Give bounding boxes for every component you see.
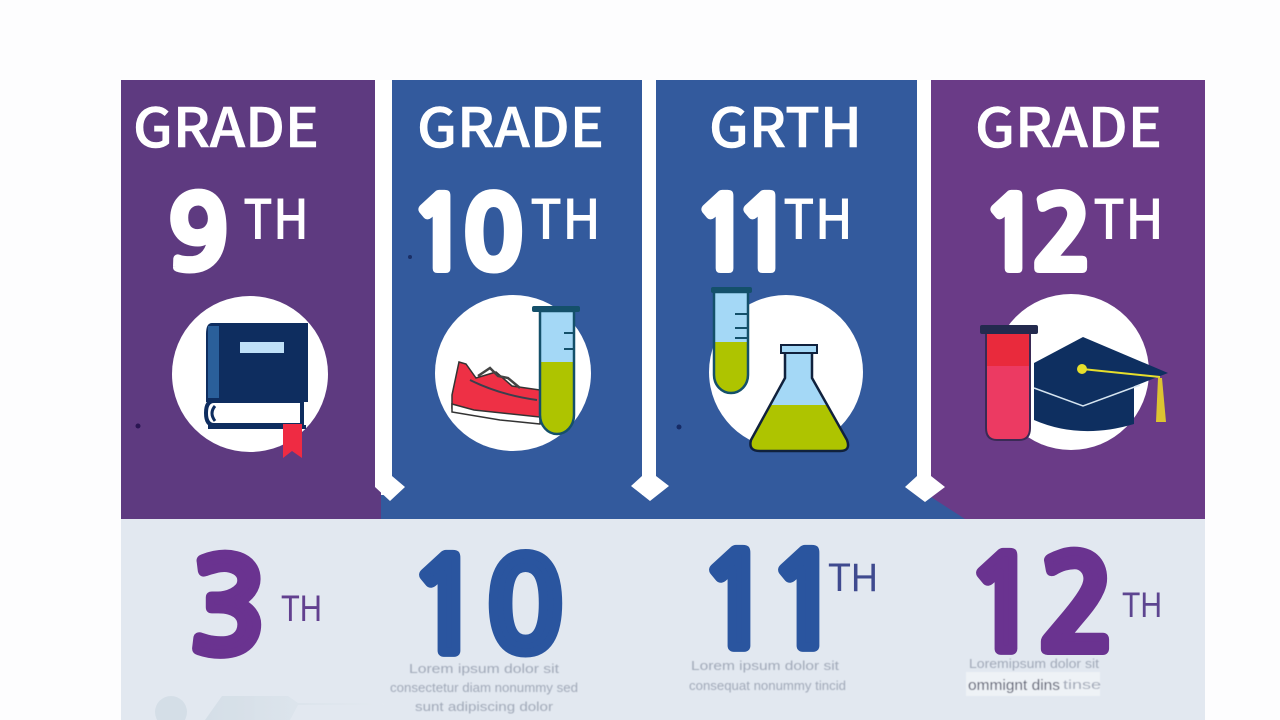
number: 11th xyxy=(692,175,853,284)
icon: sneaker and test tube xyxy=(435,295,591,451)
number: 10th xyxy=(409,175,601,284)
column: 12 xyxy=(964,543,1162,696)
column: 12: TH xyxy=(1122,586,1162,625)
description: 11: consequat nonummy tincid xyxy=(689,678,846,693)
number: 10th: TH xyxy=(530,175,601,255)
column: 10: 10 xyxy=(407,545,564,672)
heading: grade 10: GRADE xyxy=(417,84,604,163)
number: 9th: 9 xyxy=(168,185,229,284)
description: 10 xyxy=(390,661,578,714)
description: 12: tinse xyxy=(1063,677,1101,692)
blue base strip xyxy=(381,495,971,519)
column: 3th xyxy=(189,546,322,673)
panel: grade 11 xyxy=(656,80,917,519)
icon: book xyxy=(172,296,328,458)
panel: grade 9 xyxy=(121,80,381,519)
description: 10: sunt adipiscing dolor xyxy=(415,699,554,714)
number: 9th xyxy=(168,175,309,284)
number: 12th: 12 xyxy=(981,185,1093,284)
divider arrow 2 xyxy=(631,80,669,501)
number: 11th: 11 xyxy=(692,185,795,284)
heading: grade 12: GRADE xyxy=(975,84,1162,163)
heading: grade 11: GRTH xyxy=(709,84,862,163)
panel: bottom section xyxy=(121,519,1205,720)
column: 11: 11 xyxy=(697,540,844,667)
column: 11: TH xyxy=(828,556,878,600)
column: 11 xyxy=(689,540,878,693)
speck xyxy=(136,424,140,428)
column: 12: 12 xyxy=(964,543,1116,670)
divider arrow 1 xyxy=(375,80,405,501)
description: 11: Lorem ipsum dolor sit xyxy=(691,658,839,673)
icon: red tube and graduation cap xyxy=(980,294,1168,450)
speck xyxy=(676,424,682,430)
column: 3th: TH xyxy=(281,588,322,629)
number: 12th: TH xyxy=(1093,175,1164,255)
description: 11 xyxy=(689,658,846,693)
description: 10: Lorem ipsum dolor sit xyxy=(409,661,559,676)
panel: grade 12 xyxy=(931,80,1205,519)
number: 12th xyxy=(981,175,1164,284)
description: 12: Loremipsum dolor sit xyxy=(969,656,1099,671)
column: 3th: 3 xyxy=(189,546,267,673)
description: 10: consectetur diam nonummy sed xyxy=(390,680,578,695)
heading: grade 9: GRADE xyxy=(133,84,319,163)
speck xyxy=(408,255,412,259)
description: 12: ommignt dins xyxy=(968,678,1060,694)
number: 9th: TH xyxy=(243,175,309,255)
panel: grade 10 xyxy=(392,80,642,519)
divider arrow 3 xyxy=(905,80,945,502)
icon: test tube and flask xyxy=(709,287,863,451)
number: 10th: 10 xyxy=(409,185,524,284)
faded decoration: figure and line xyxy=(155,696,384,720)
column: 10 xyxy=(390,545,578,714)
description: 12 xyxy=(966,656,1101,696)
number: 11th: TH xyxy=(783,175,853,255)
